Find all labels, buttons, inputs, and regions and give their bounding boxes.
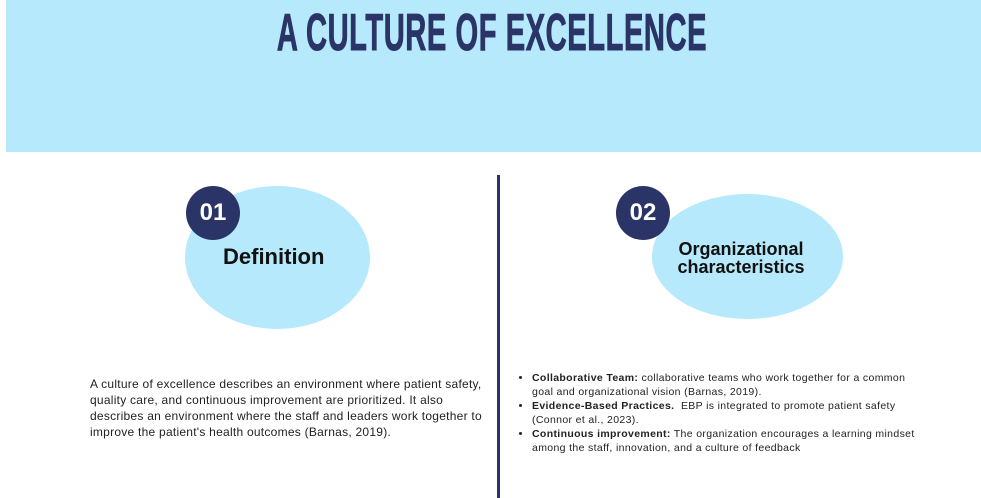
characteristics list: Collaborative Team: collaborative teams who work together for a common goal and organizational vision (Barnas, 2019). xyxy=(532,372,905,398)
ellipse xyxy=(652,194,843,319)
title: A CULTURE OF EXCELLENCE xyxy=(277,4,707,62)
header band xyxy=(6,0,981,152)
definition text: A culture of excellence describes an environment where patient safety, quality care, and continuous improvement are prioritized. It also describes an environment where the staff and leaders work together to improve the patient's health outcomes (Barnas, 2019). xyxy=(90,377,482,439)
panel: organizational characteristics xyxy=(616,186,843,319)
panel: definition xyxy=(185,186,370,329)
heading: Organizational characteristics xyxy=(677,239,805,277)
badge 02: 02 xyxy=(630,199,656,226)
heading: definition: Definition xyxy=(223,244,324,269)
badge 01 xyxy=(186,186,240,240)
characteristics list xyxy=(519,372,915,454)
badge 02 xyxy=(616,186,670,240)
ellipse xyxy=(185,186,370,329)
divider xyxy=(497,175,500,498)
badge 01: 01 xyxy=(200,199,226,226)
characteristics list: Continuous improvement: The organization encourages a learning mindset among the staff, innovation, and a culture of feedback xyxy=(532,428,915,454)
characteristics list: Evidence-Based Practices. EBP is integrated to promote patient safety (Connor et al., 2023). xyxy=(532,400,895,426)
